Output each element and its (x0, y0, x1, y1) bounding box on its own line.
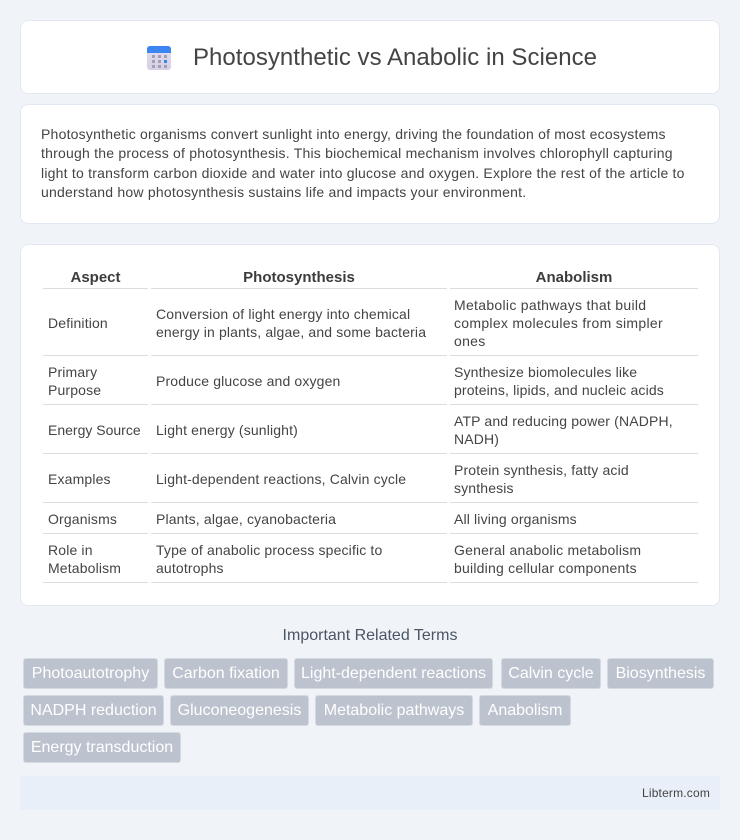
row: examples: Protein synthesis, fatty acid (454, 462, 629, 478)
related terms tags: Metabolic pathways (324, 702, 464, 719)
footer bar (20, 776, 720, 810)
row: energy source: ATP and reducing power (NADPH, (454, 413, 673, 429)
row: examples: Light-dependent reactions, Calvin cycle (156, 471, 406, 487)
table header: Photosynthesis (243, 269, 355, 286)
row: definition: ones (454, 333, 486, 349)
row: energy source (48, 413, 673, 447)
row: primary purpose: proteins, lipids, and nucleic acids (454, 382, 664, 398)
related terms tags: Calvin cycle (508, 665, 594, 682)
row: organisms: Organisms (48, 511, 117, 527)
row: definition (48, 297, 663, 349)
related terms heading: Important Related Terms (283, 627, 457, 644)
row: role in metabolism: Role in (48, 542, 93, 558)
row: definition: energy in plants, algae, and some bacteria (156, 324, 426, 340)
related terms tags: Gluconeogenesis (178, 702, 301, 719)
row: primary purpose: Produce glucose and oxygen (156, 373, 340, 389)
intro paragraph: understand how photosynthesis sustains life and impacts your environment. (41, 184, 526, 200)
row: energy source: Energy Source (48, 422, 141, 438)
comparison table panel (20, 244, 720, 606)
row: organisms (48, 511, 577, 527)
row: role in metabolism: autotrophs (156, 560, 224, 576)
row: organisms: All living organisms (454, 511, 577, 527)
row: primary purpose: Purpose (48, 382, 101, 398)
footer credit: Libterm.com (642, 786, 710, 800)
row: primary purpose: Primary (48, 364, 97, 380)
related terms tags: Energy transduction (31, 739, 173, 756)
related terms tags: Biosynthesis (616, 665, 705, 682)
intro text panel (20, 104, 720, 224)
row: examples (48, 462, 629, 496)
title: Photosynthetic vs Anabolic in Science (193, 44, 597, 71)
intro paragraph: Photosynthetic organisms convert sunlight into energy, driving the foundation of most ecosystems (41, 126, 666, 142)
row: organisms: Plants, algae, cyanobacteria (156, 511, 336, 527)
row: examples: Examples (48, 471, 111, 487)
row: role in metabolism (48, 542, 641, 576)
row: role in metabolism: General anabolic metabolism (454, 542, 641, 558)
related terms tags: Anabolism (488, 702, 562, 719)
related terms tags: Photoautotrophy (32, 665, 149, 682)
row: definition: Conversion of light energy into chemical (156, 306, 410, 322)
table header: Aspect (70, 269, 121, 286)
table header: Anabolism (536, 269, 612, 286)
table header (70, 269, 612, 286)
intro paragraph (41, 126, 685, 200)
row: energy source: Light energy (sunlight) (156, 422, 298, 438)
row: primary purpose: Synthesize biomolecules like (454, 364, 637, 380)
intro paragraph: through the process of photosynthesis. This biochemical mechanism involves chlorophyll capturing (41, 145, 673, 161)
row: examples: synthesis (454, 480, 514, 496)
related terms tags (23, 658, 714, 763)
row: role in metabolism: building cellular components (454, 560, 637, 576)
related terms tags: Carbon fixation (172, 665, 280, 682)
row: role in metabolism: Metabolism (48, 560, 121, 576)
header card (20, 20, 720, 94)
related terms tags: NADPH reduction (30, 702, 157, 719)
row: primary purpose (48, 364, 664, 398)
icon: calendar grid (147, 46, 171, 70)
row: definition: complex molecules from simpler (454, 315, 663, 331)
related terms tags: Light-dependent reactions (301, 665, 486, 682)
row: energy source: NADH) (454, 431, 499, 447)
row: role in metabolism: Type of anabolic process specific to (156, 542, 382, 558)
row: definition: Metabolic pathways that build (454, 297, 646, 313)
intro paragraph: light to transform carbon dioxide and water into glucose and oxygen. Explore the rest of the article to (41, 165, 685, 181)
row: definition: Definition (48, 315, 108, 331)
